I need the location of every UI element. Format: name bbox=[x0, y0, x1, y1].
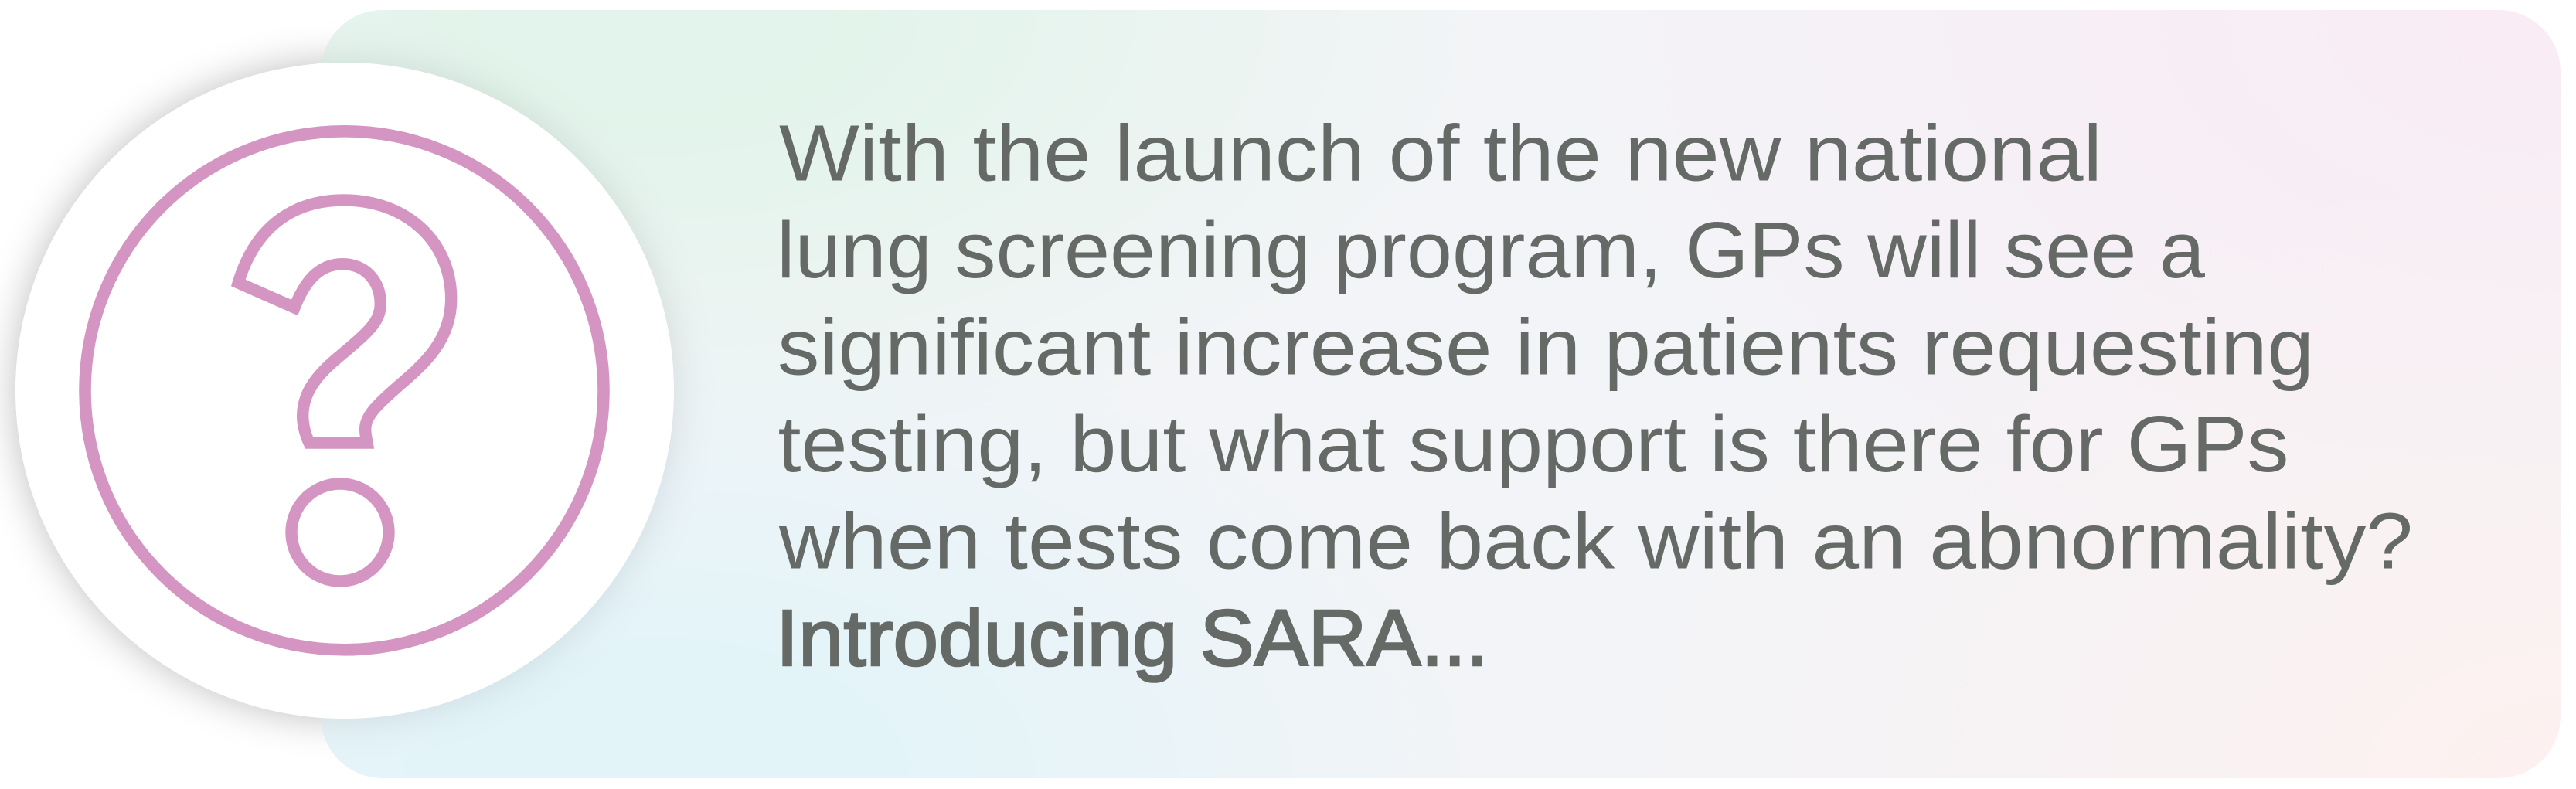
bold closing line: Introducing SARA... bbox=[776, 593, 1489, 682]
text block: introduction: significant increase in patients requesting bbox=[778, 303, 2314, 391]
text block: introduction: lung screening program, GPs will see a bbox=[777, 206, 2206, 294]
icon ring bbox=[85, 131, 604, 650]
text block: introduction: testing, but what support is there for GPs bbox=[778, 400, 2289, 488]
text block: introduction: when tests come back with an abnormality? bbox=[778, 496, 2413, 586]
text block: introduction: With the launch of the new national bbox=[779, 108, 2102, 198]
disc shadow bbox=[15, 62, 674, 719]
question mark glyph bbox=[238, 200, 451, 581]
icon disc: white circle bbox=[15, 62, 674, 719]
